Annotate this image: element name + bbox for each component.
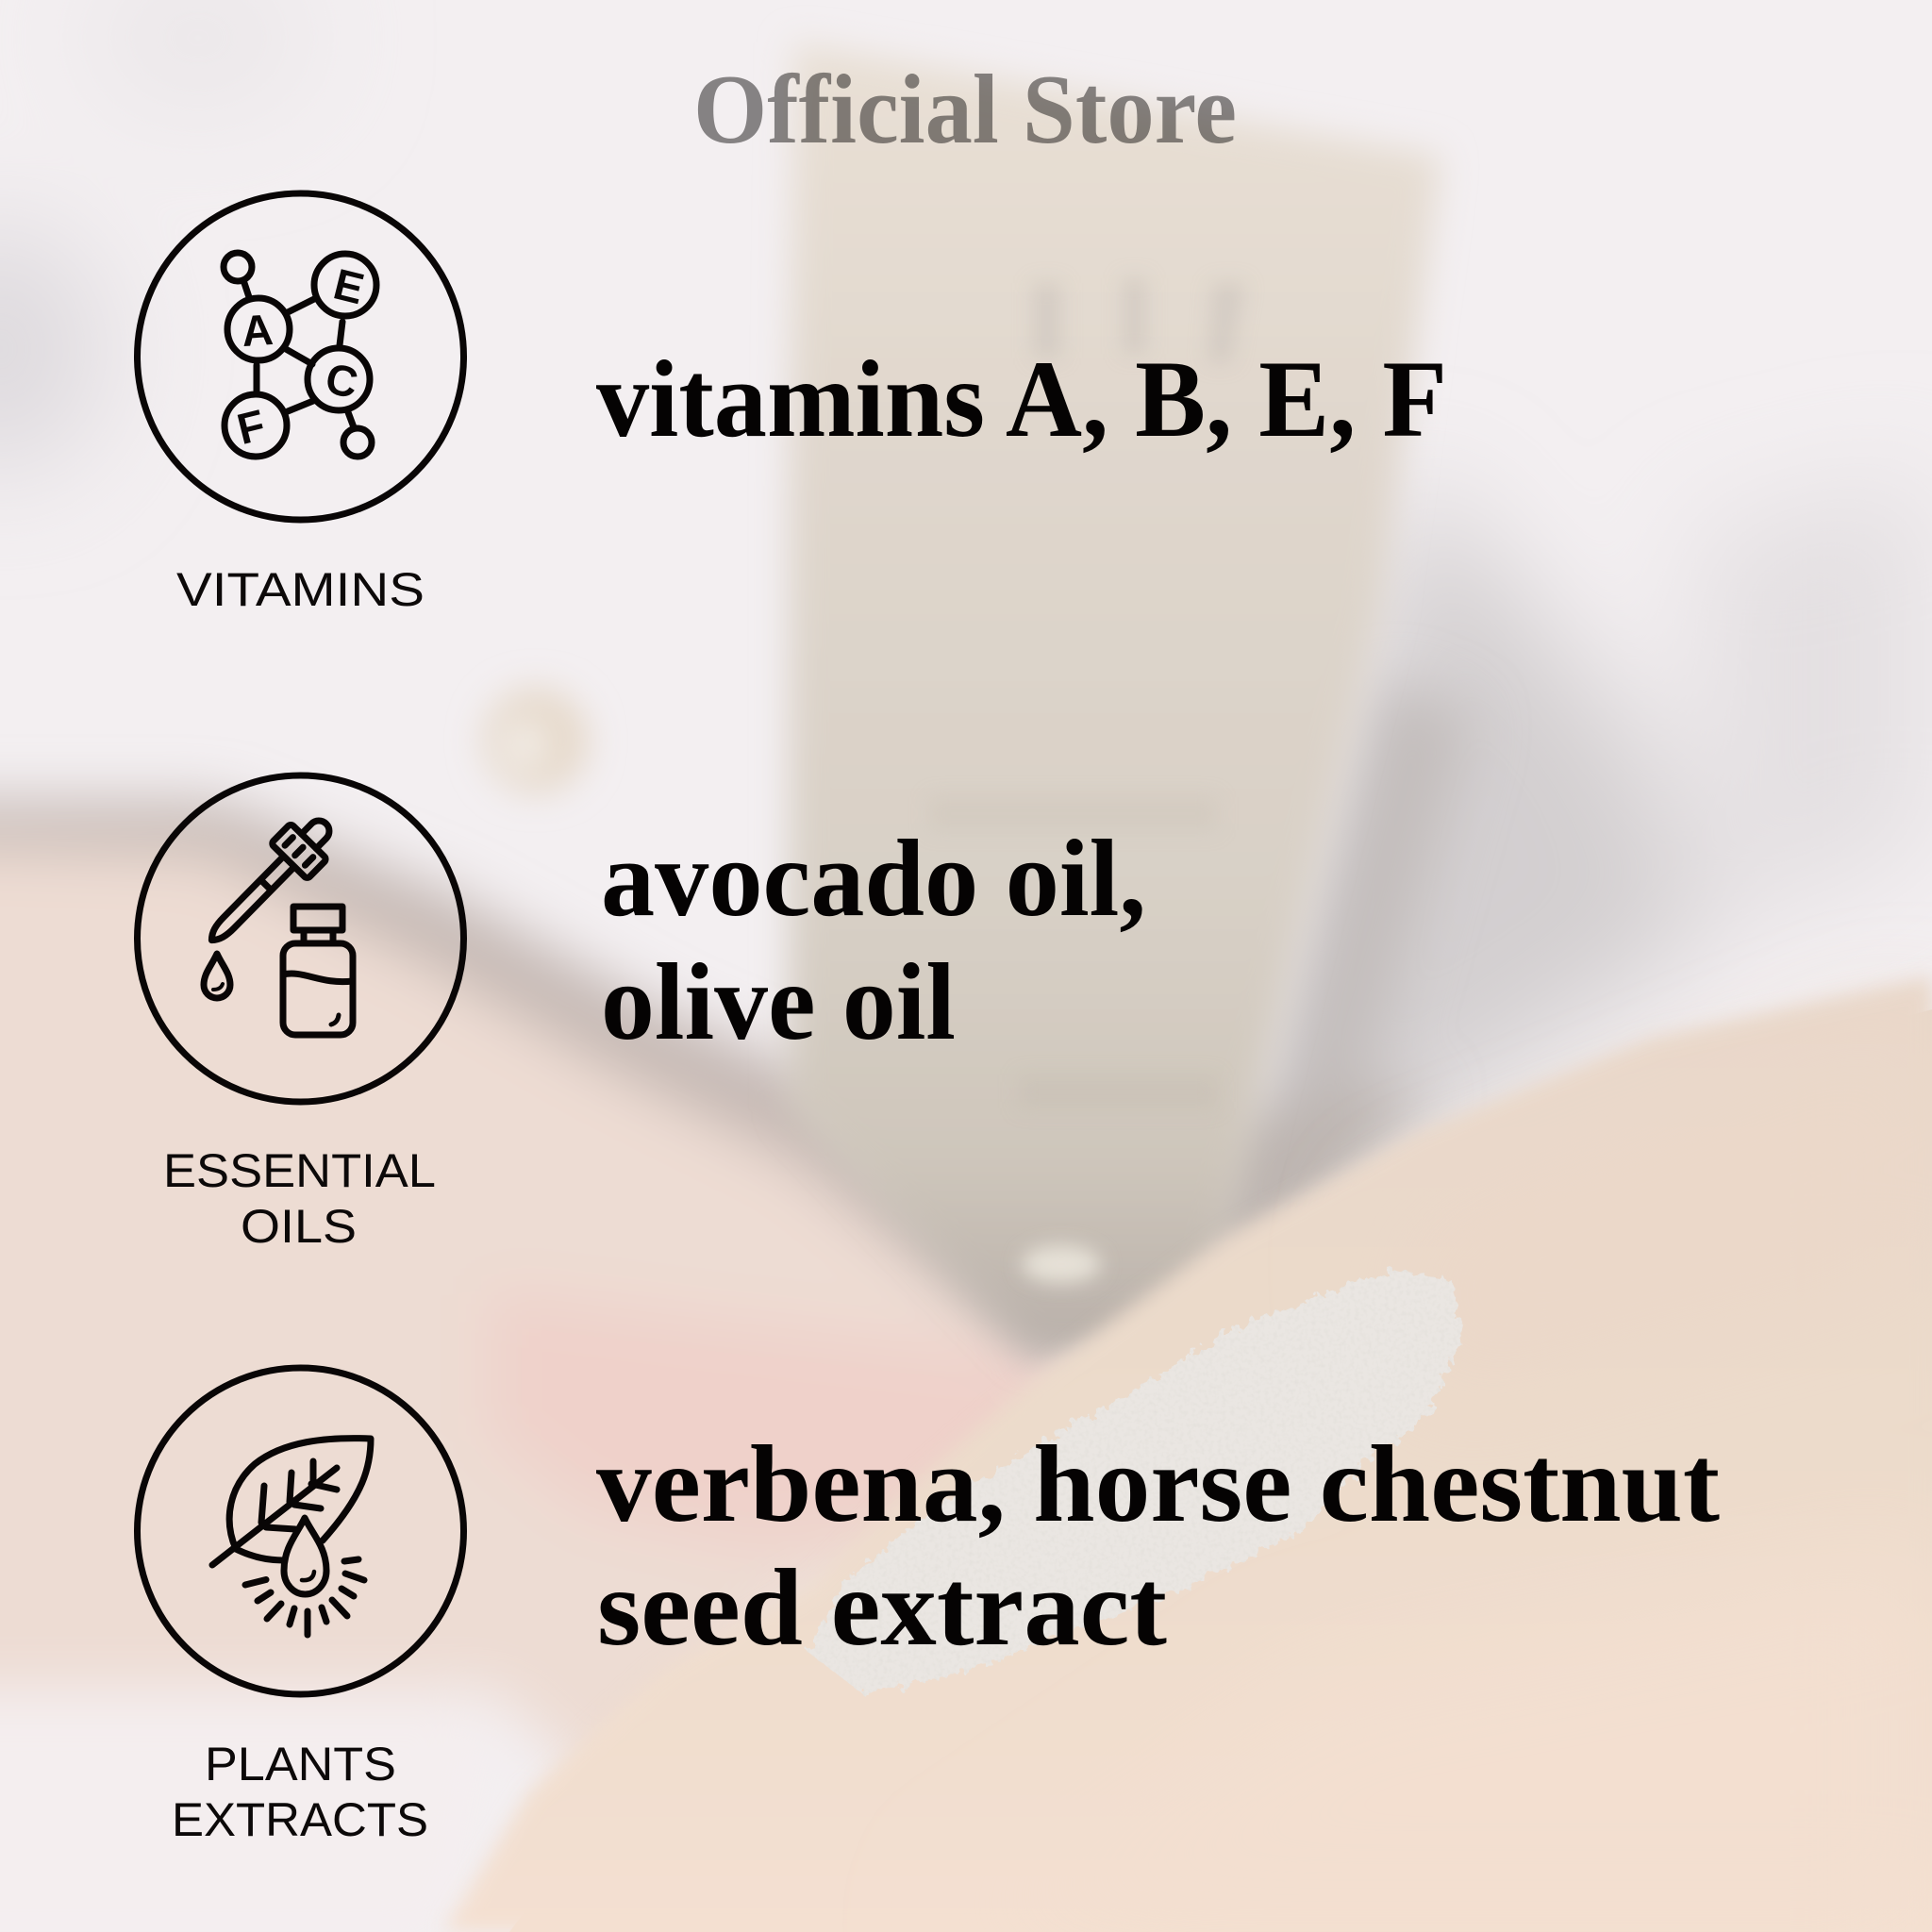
- headline: oils list: [601, 818, 1146, 1063]
- title: Official Store: [693, 54, 1237, 164]
- headline: plants list: verbena, horse chestnut: [596, 1424, 1720, 1545]
- headline: plants list: [596, 1424, 1720, 1669]
- label: plants extracts: [172, 1738, 428, 1846]
- panel: essential oils: [138, 775, 1146, 1253]
- panel: plant extracts: [138, 1368, 1720, 1846]
- headline: vitamins list: vitamins A, B, E, F: [596, 339, 1447, 460]
- panel: vitamins: [138, 193, 1447, 616]
- icon: vitamins molecule: F: [232, 400, 270, 454]
- headline: plants list: seed extract: [597, 1547, 1167, 1669]
- label: vitamins: VITAMINS: [176, 563, 425, 616]
- label: essential oils: OILS: [241, 1200, 357, 1253]
- label: plants extracts: PLANTS: [205, 1738, 396, 1790]
- icon: vitamins molecule: C: [322, 353, 362, 408]
- icon: dropper and bottle: [138, 775, 464, 1102]
- icon: vitamins molecule: [138, 193, 464, 520]
- headline: oils list: avocado oil,: [601, 818, 1146, 940]
- headline: oils list: olive oil: [601, 941, 956, 1063]
- label: plants extracts: EXTRACTS: [172, 1793, 428, 1846]
- icon: vitamins molecule: E: [329, 259, 369, 313]
- icon: vitamins molecule: A: [240, 305, 275, 356]
- label: essential oils: [163, 1144, 436, 1253]
- label: essential oils: ESSENTIAL: [163, 1144, 436, 1197]
- icon: leaf with drop: [138, 1368, 464, 1694]
